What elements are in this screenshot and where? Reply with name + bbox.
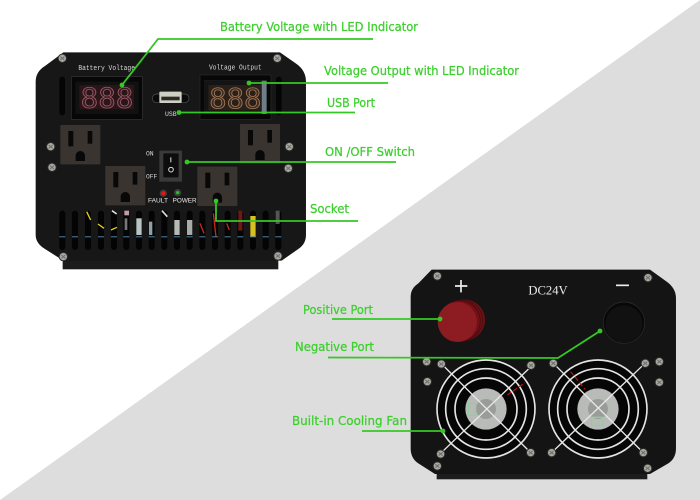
rear mounting foot [437,468,647,479]
front panel device [36,52,306,269]
voltage output display [200,75,271,119]
USB port [152,92,189,118]
callout: voltage output: Voltage Output with LED Indicator [324,64,519,78]
minus symbol [616,283,629,288]
status lights [148,189,197,205]
socket 4 [197,167,237,206]
voltage output caption: Voltage Output [209,64,262,72]
ventilation slots with wiring [59,211,281,250]
left cooling fan [436,359,536,459]
panel screws [46,54,294,261]
rear panel device [411,270,676,479]
USB port: USB [165,111,177,118]
rear panel body [411,270,676,474]
callout: negative port [295,329,602,358]
status lights: FAULT [148,198,168,205]
callout: on/off switch [185,145,415,164]
mounting foot [63,257,278,269]
callout: cooling fan [292,414,445,433]
voltage output display: 888 [209,84,261,115]
socket 1 [60,125,100,164]
right cooling fan [547,359,650,459]
rear panel screws [422,271,664,473]
positive terminal knob [438,299,485,342]
callout: positive port [303,303,442,321]
callout: socket: Socket [310,202,349,216]
DC24V marking: DC24V [528,282,568,297]
callout: battery voltage [120,20,418,87]
power switch [146,151,182,182]
negative terminal knob [603,302,645,343]
socket 3 [105,166,145,205]
plus symbol [455,280,467,292]
callout: USB port: USB Port [327,96,375,110]
callout: negative port: Negative Port [295,340,374,354]
battery voltage display [71,77,142,119]
status lights: POWER [173,198,197,205]
callout: on/off switch: ON /OFF Switch [325,145,415,159]
callout: USB port [177,96,375,115]
battery voltage display: 888 [81,83,133,114]
callout: positive port: Positive Port [303,303,373,317]
callout: voltage output [247,64,519,85]
power switch: ON [146,151,154,158]
battery voltage caption: Battery Voltage [78,65,135,73]
callout: battery voltage: Battery Voltage with LED Indicator [220,20,418,34]
callout: socket [214,199,358,221]
power switch: OFF [146,174,158,181]
callout: cooling fan: Built-in Cooling Fan [292,414,407,428]
side slots [59,77,282,115]
panel body [36,52,306,261]
socket 2 [240,124,280,163]
